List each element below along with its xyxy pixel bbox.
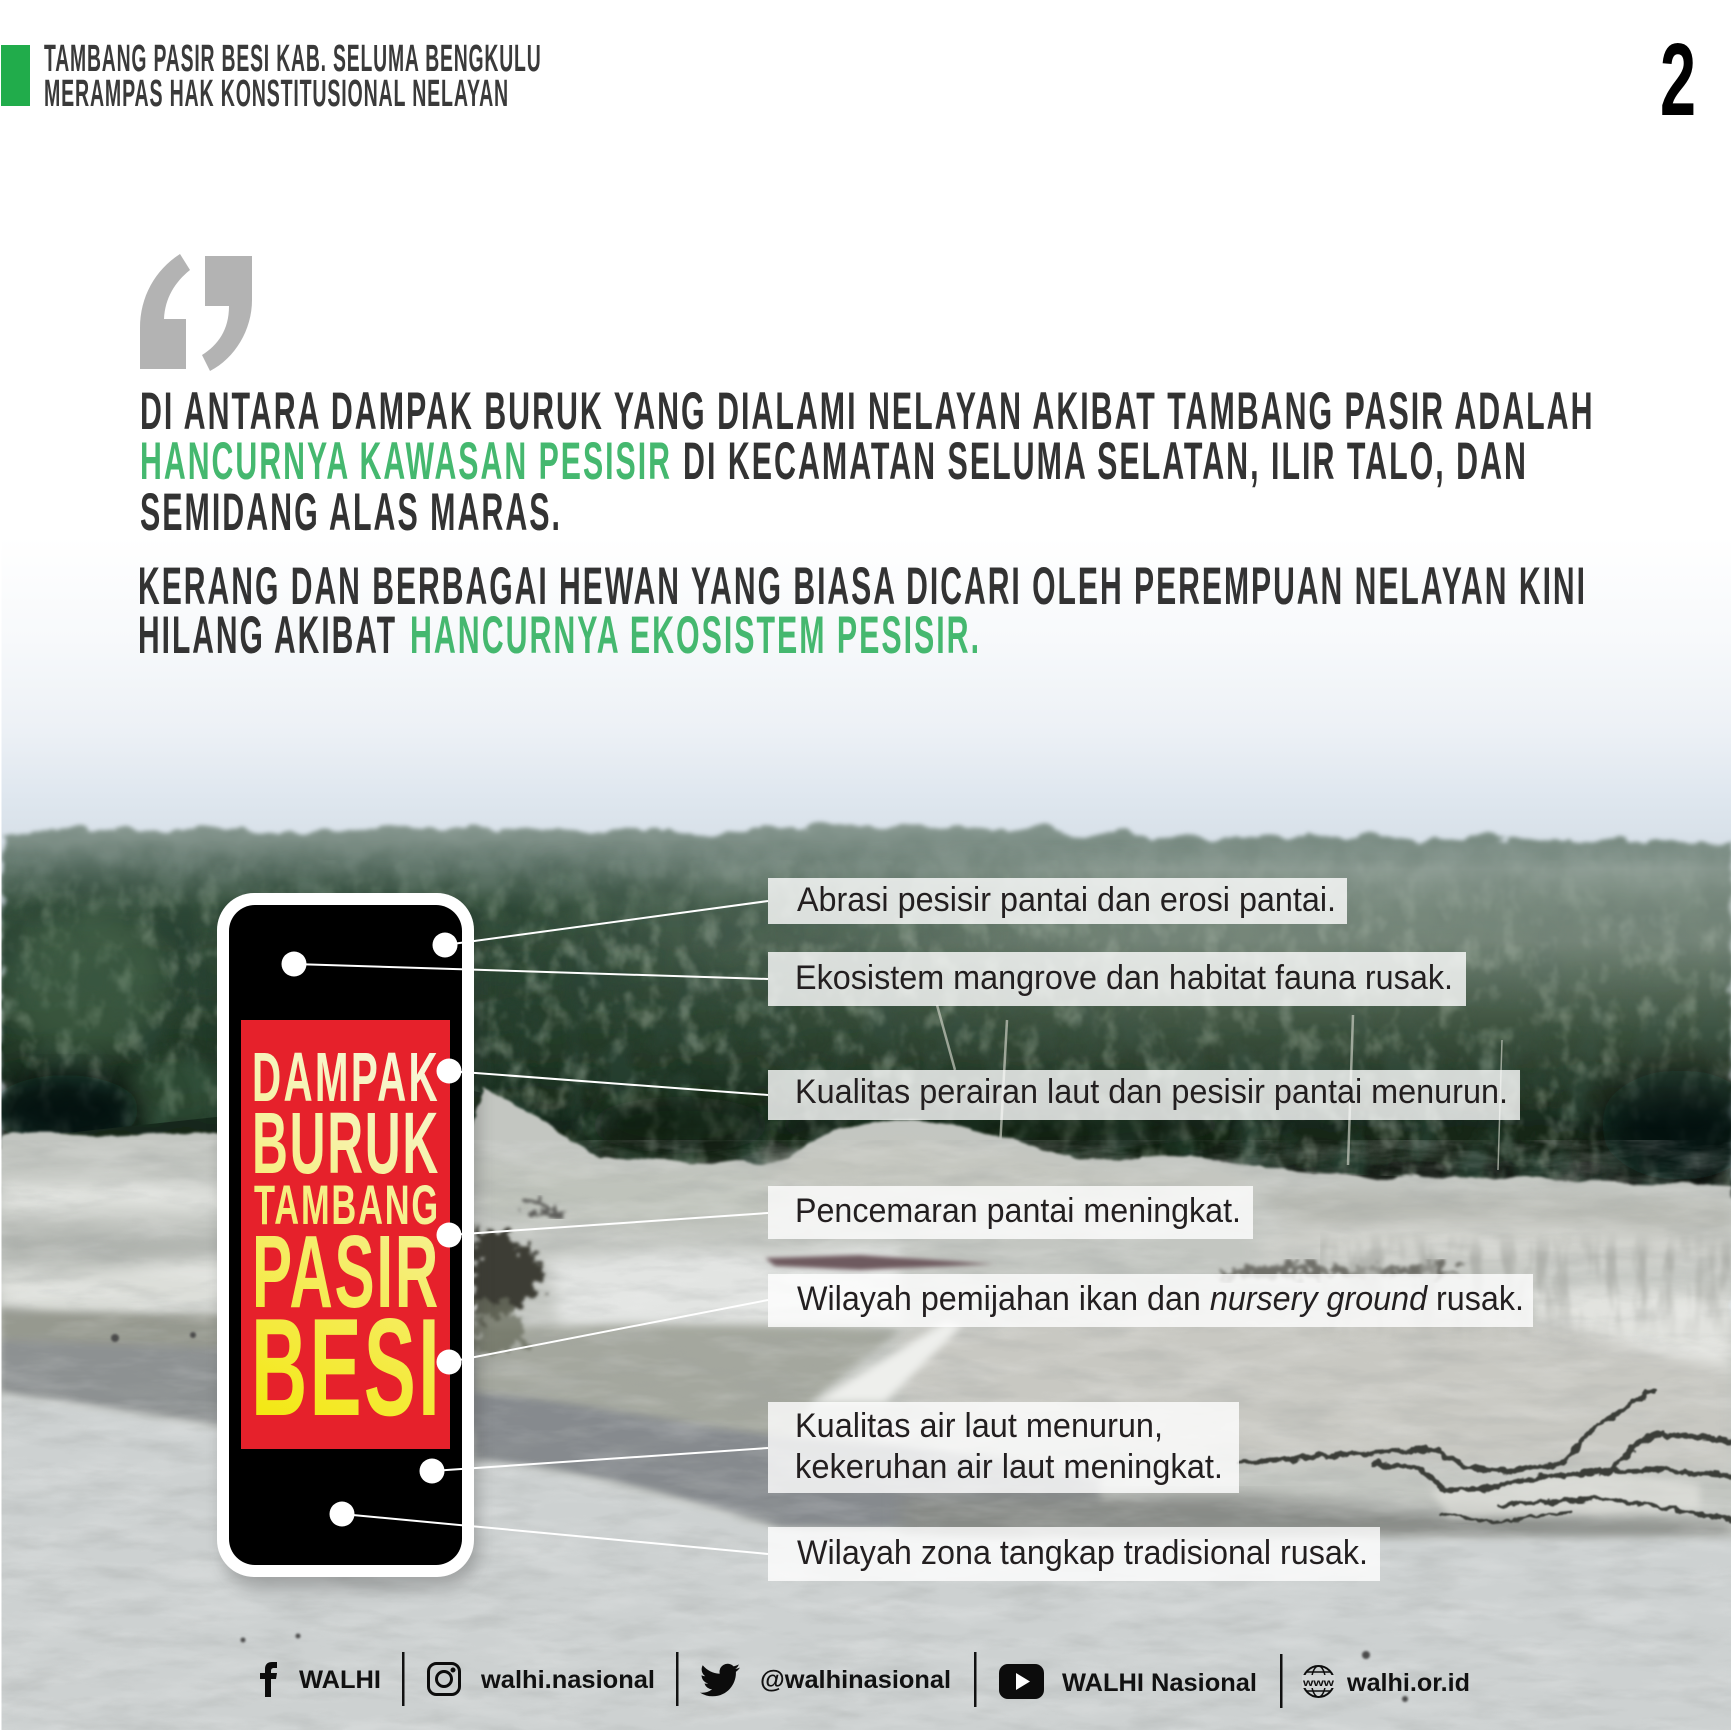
specks <box>111 1332 1408 1702</box>
phone-shaped panel: dampak buruk <box>217 893 479 1589</box>
tree trunks <box>937 1005 1502 1170</box>
bright streak and sand details <box>815 1322 962 1402</box>
icon: globe <box>1302 1666 1335 1697</box>
label: zona tangkap: Wilayah zona tangkap tradisional rusak. <box>797 1534 1368 1572</box>
header title: MERAMPAS HAK KONSTITUSIONAL NELAYAN <box>44 73 509 115</box>
red title block: DAMPAK <box>252 1038 440 1116</box>
grey shadow band and water <box>0 1308 1100 1530</box>
social media footer: WALHI <box>299 1666 381 1694</box>
label: ekosistem mangrove: Ekosistem mangrove dan habitat fauna rusak. <box>795 959 1453 997</box>
page number: 2 <box>1660 22 1696 137</box>
icon: instagram <box>428 1664 460 1694</box>
header green bar <box>1 45 30 106</box>
label: kualitas air laut <box>768 1402 1239 1493</box>
background photo: sand mine with oil palm trees fading into white <box>2 641 1731 1730</box>
red title block <box>241 1020 450 1449</box>
red title block: BESI <box>251 1290 442 1445</box>
dark bush <box>474 1198 565 1352</box>
red title block: TAMBANG <box>254 1173 440 1236</box>
quote paragraph one: HANCURNYA KAWASAN PESISIR <box>140 432 672 491</box>
header title <box>44 38 542 115</box>
label: abrasi: Abrasi pesisir pantai dan erosi pantai. <box>797 881 1336 919</box>
quote paragraph two <box>138 557 1587 665</box>
social media footer: WALHI Nasional <box>1062 1669 1257 1697</box>
icon: quotation marks <box>140 254 252 371</box>
lower sand <box>0 1395 1731 1730</box>
label: ekosistem mangrove <box>768 952 1466 1006</box>
icon: globe: www <box>1302 1678 1334 1689</box>
quote paragraph one <box>140 382 1594 542</box>
icon: youtube <box>999 1664 1044 1699</box>
label: pencemaran pantai <box>768 1186 1253 1239</box>
icon: twitter <box>700 1664 740 1696</box>
social media footer: walhi.nasional <box>480 1666 655 1694</box>
red title block: PASIR <box>252 1214 440 1329</box>
social media footer <box>260 1652 1470 1708</box>
sand <box>0 1088 1731 1730</box>
social media footer: @walhinasional <box>760 1666 951 1694</box>
cracks <box>1430 1470 1700 1518</box>
quote paragraph two: HANCURNYA EKOSISTEM PESISIR. <box>410 606 981 665</box>
label: kualitas perairan: Kualitas perairan laut dan pesisir pantai menurun. <box>795 1073 1508 1111</box>
white edge of page <box>0 0 2 1730</box>
label: wilayah pemijahan <box>768 1274 1533 1327</box>
header title: TAMBANG PASIR BESI KAB. SELUMA BENGKULU <box>44 38 542 80</box>
label: kualitas air laut: Kualitas air laut menurun, <box>795 1407 1163 1445</box>
connector lines and dots <box>282 901 768 1554</box>
quote paragraph two: HILANG AKIBAT <box>138 606 397 665</box>
social media footer: walhi.or.id <box>1346 1669 1470 1697</box>
quote paragraph one: SEMIDANG ALAS MARAS. <box>140 483 562 542</box>
red title block: BURUK <box>252 1095 440 1192</box>
dark debris <box>1218 1238 1731 1330</box>
label: kualitas air laut: kekeruhan air laut meningkat. <box>795 1448 1223 1486</box>
tree line <box>0 824 1731 1200</box>
label: zona tangkap <box>768 1527 1380 1581</box>
label: wilayah pemijahan: Wilayah pemijahan ikan dan nursery ground rusak. <box>797 1280 1524 1318</box>
label: pencemaran pantai: Pencemaran pantai meningkat. <box>795 1192 1241 1230</box>
icon: facebook <box>260 1662 277 1697</box>
